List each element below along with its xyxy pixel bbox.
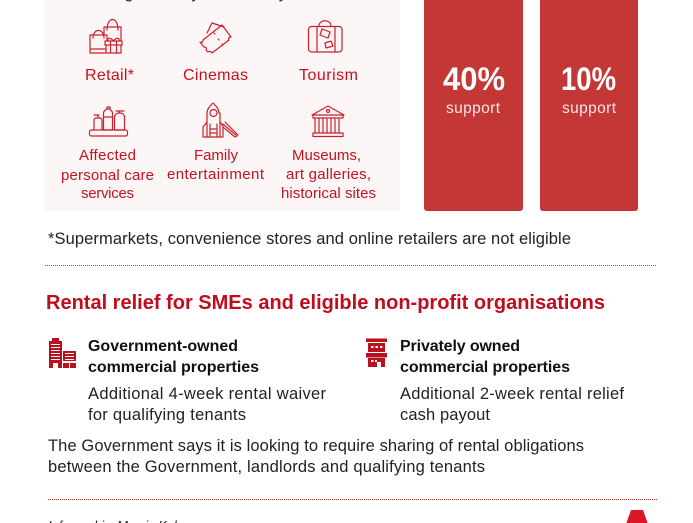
paragraph: sharing of rental obligations — [48, 437, 584, 476]
label: tourism: Tourism — [299, 67, 358, 84]
label: museums, art galleries, historical sites — [281, 147, 376, 202]
heading: rental relief: Rental relief for SMEs and eligible non-profit organisations — [46, 292, 605, 314]
subheading: privately owned: Privately owned — [400, 338, 520, 355]
paragraph: sharing of rental obligations: between the Government, landlords and qualifying tenants — [48, 458, 485, 476]
label: museums, art galleries, historical sites: historical sites — [281, 185, 376, 202]
label: affected personal care services: services — [81, 185, 134, 202]
label: affected personal care services: personal care — [61, 167, 154, 184]
label: affected personal care services: Affected — [79, 147, 136, 164]
icon: personal care bottles — [90, 107, 128, 136]
text: 4-week waiver: for qualifying tenants — [88, 406, 246, 424]
subheading: government-owned — [88, 338, 259, 376]
text: 2-week relief — [400, 385, 624, 424]
icon: museum — [312, 106, 344, 136]
label: family entertainment — [167, 147, 265, 183]
label: retail: Retail* — [85, 67, 134, 84]
subheading: government-owned: Government-owned — [88, 338, 238, 355]
subheading: privately owned — [400, 338, 570, 376]
icon: suitcase — [308, 21, 342, 52]
text: 4-week waiver — [88, 385, 326, 424]
text: 2-week relief: Additional 2-week rental relief — [400, 385, 624, 403]
text: 4-week waiver: Additional 4-week rental waiver — [88, 385, 326, 403]
label: family entertainment: entertainment — [167, 166, 265, 183]
label: affected personal care services — [61, 147, 154, 202]
panel: 40% support: support — [446, 100, 501, 117]
icon: private building — [366, 338, 387, 367]
panel: 40% support — [424, 0, 523, 211]
logo — [626, 510, 648, 523]
label: family entertainment: Family — [194, 147, 238, 164]
label: cinemas: Cinemas — [183, 67, 248, 84]
subheading: government-owned: commercial properties — [88, 359, 259, 376]
label: museums, art galleries, historical sites: art galleries, — [286, 166, 371, 183]
subheading: privately owned: commercial properties — [400, 359, 570, 376]
label: museums, art galleries, historical sites: Museums, — [292, 147, 361, 164]
paragraph: sharing of rental obligations: The Government says it is looking to require sharing of rental obligations — [48, 437, 584, 455]
text: 2-week relief: cash payout — [400, 406, 490, 424]
icon: cinema tickets — [200, 23, 231, 53]
icon: rocket slide — [203, 103, 238, 137]
column: privately owned properties — [366, 338, 624, 424]
panel: 10% support — [540, 0, 638, 211]
footnote: *Supermarkets, convenience stores and online retailers are not eligible — [48, 230, 571, 248]
icon: government buildings — [49, 338, 76, 368]
panel: 40% support: 40% — [443, 61, 505, 97]
column: government-owned properties — [49, 338, 326, 424]
panel: eligible sectors — [45, 0, 400, 211]
icon: retail bags and gift — [90, 20, 122, 53]
panel: 10% support: 10% — [561, 61, 616, 97]
panel: 10% support: support — [562, 100, 617, 117]
